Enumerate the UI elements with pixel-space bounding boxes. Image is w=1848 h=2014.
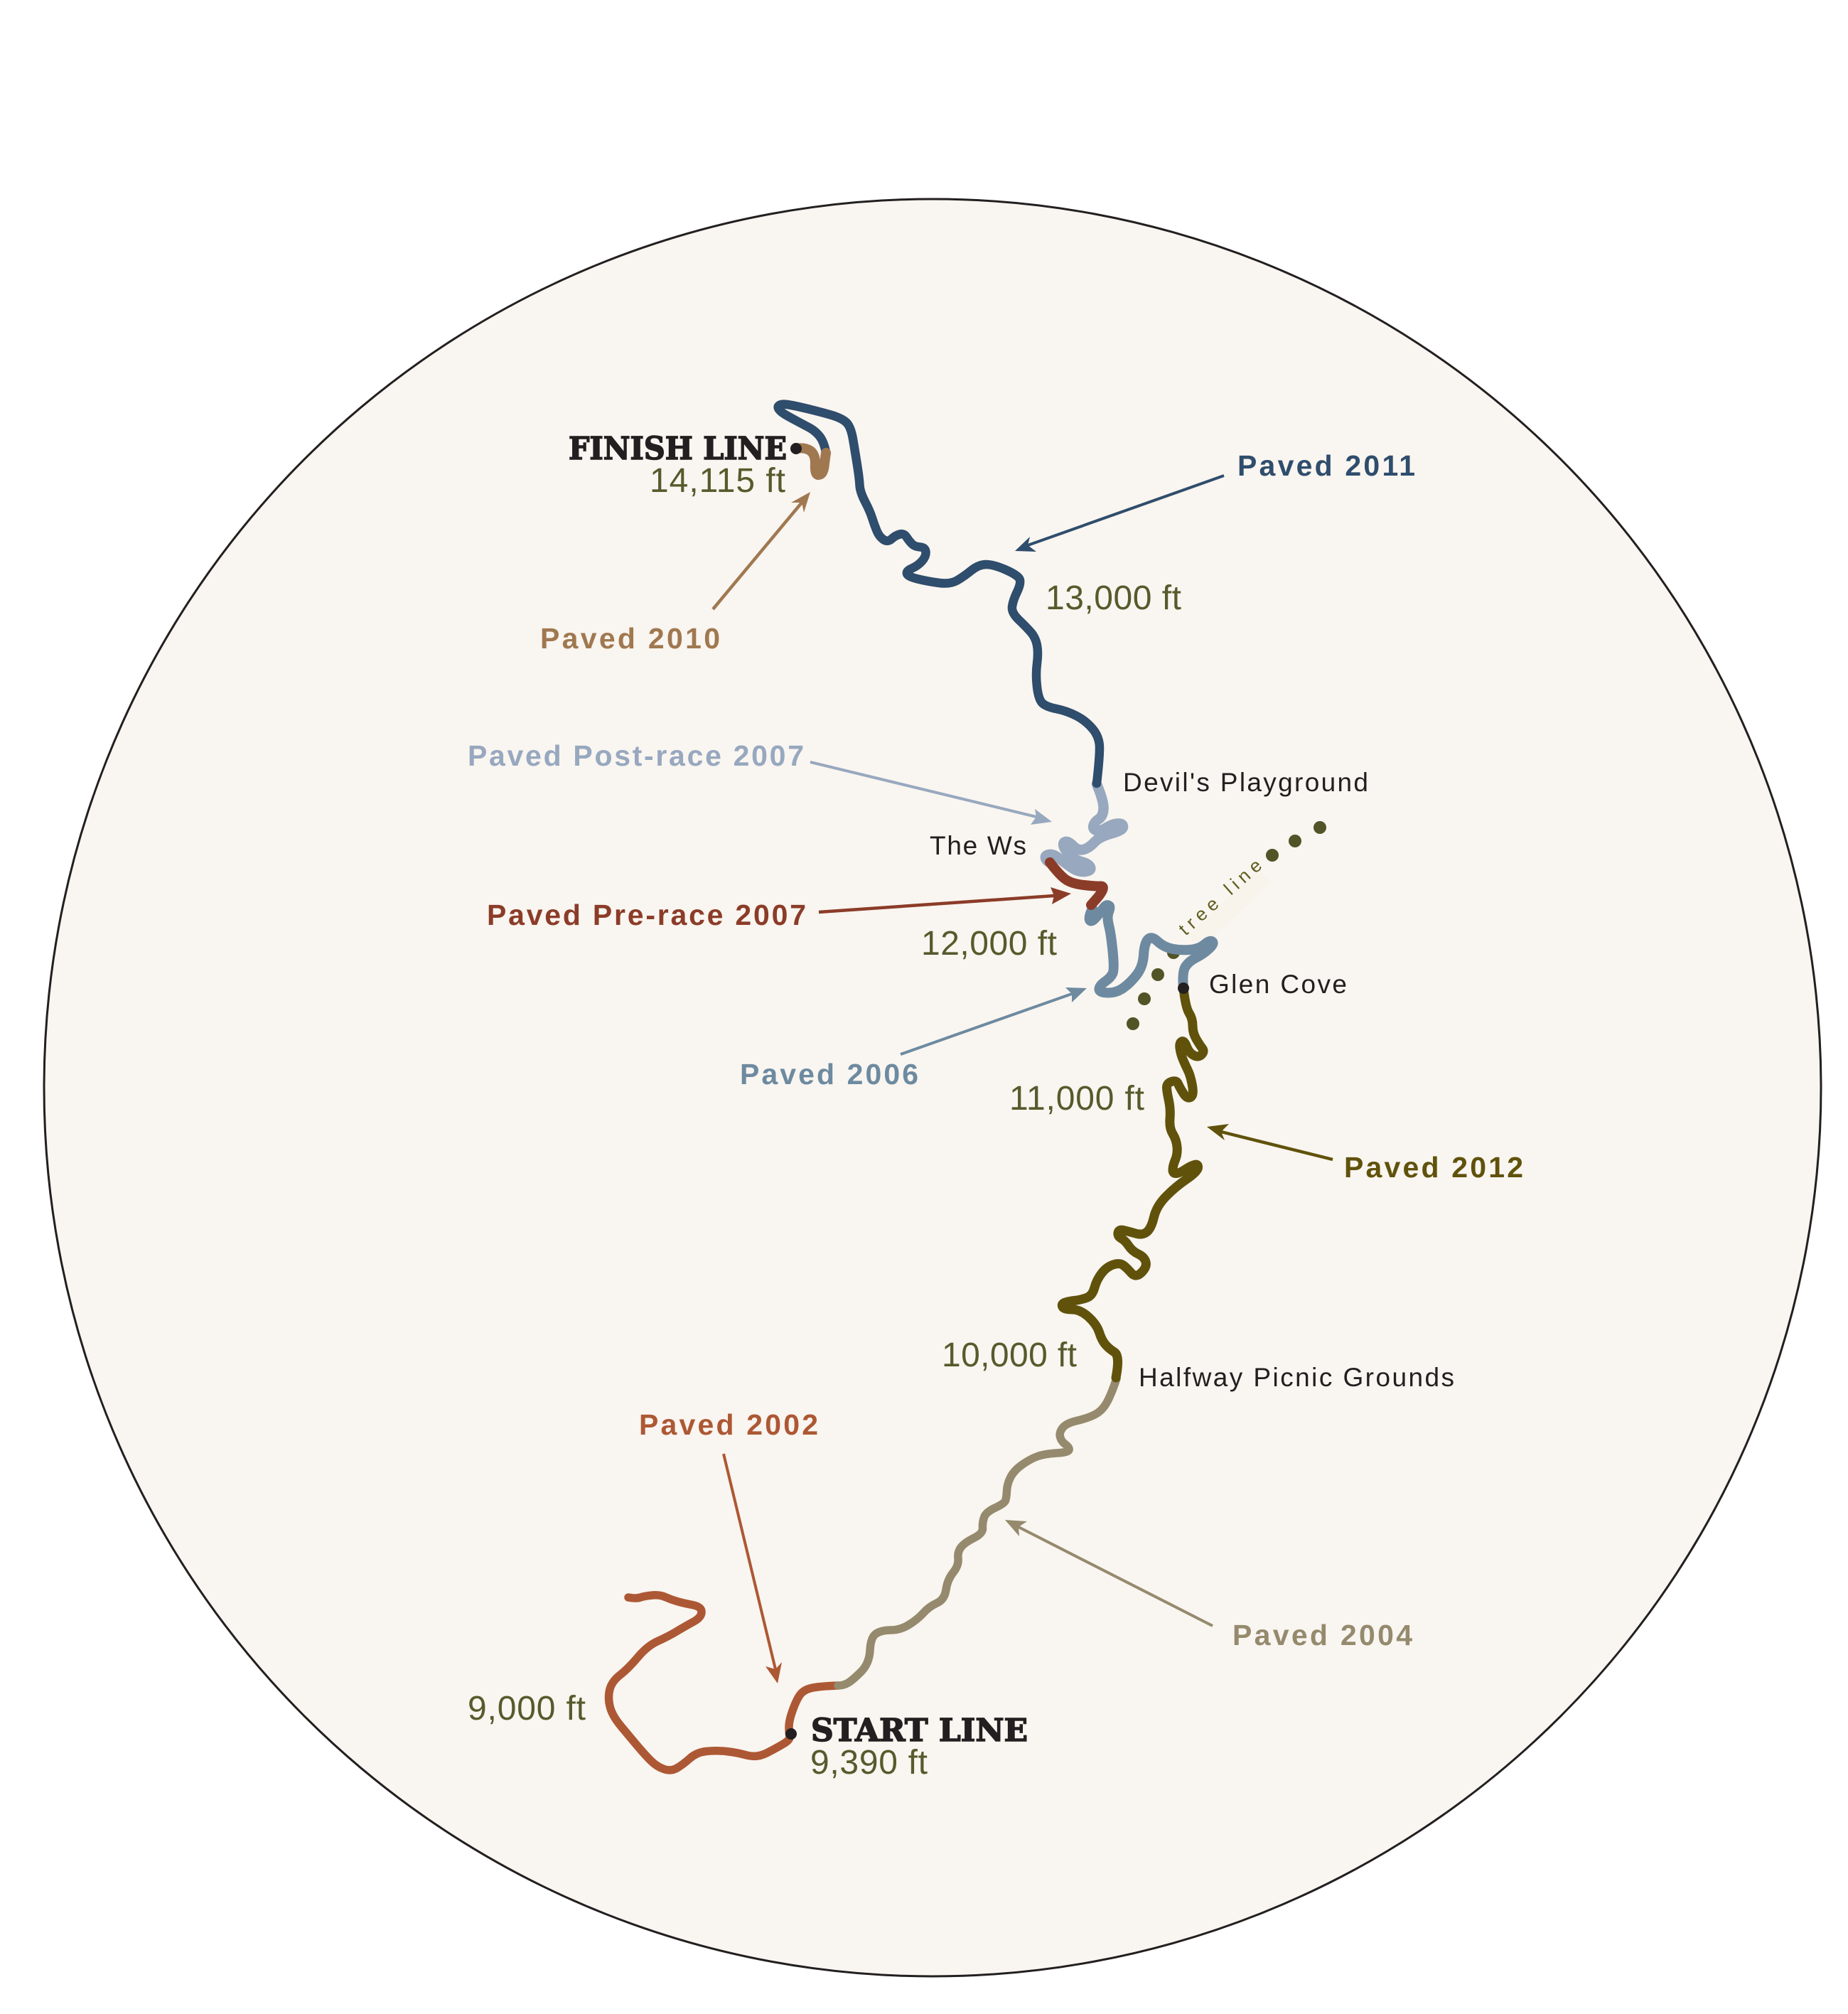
road segment: paved 2004: [838, 1378, 1117, 1686]
marker: finish line dot: [790, 443, 802, 454]
label: Paved Post-race 2007: Paved Post-race 2007: [468, 739, 804, 772]
road segment: paved 2002: [608, 1595, 838, 1770]
marker: Glen Cove dot: [1178, 982, 1189, 994]
elevation: 10,000 ft: 10,000 ft: [942, 1337, 1077, 1374]
elevation: 14,115 ft: 14,115 ft: [650, 462, 785, 500]
place: Devil's Playground: Devil's Playground: [1123, 768, 1368, 797]
place: The Ws: The Ws: [930, 831, 1026, 860]
arrow: paved 2011: [1015, 476, 1224, 552]
elevation: 9,000 ft: 9,000 ft: [468, 1690, 586, 1728]
arrow: paved post-race 2007: [810, 762, 1052, 825]
road segment: paved 2011: [778, 405, 1100, 783]
label: Paved 2004: Paved 2004: [1232, 1619, 1412, 1651]
arrow: paved 2004: [1005, 1520, 1213, 1626]
place: Glen Cove: Glen Cove: [1209, 970, 1347, 999]
road segment: paved 2012: [1062, 988, 1203, 1378]
label: Paved 2012: Paved 2012: [1344, 1151, 1523, 1184]
elevation: 9,390 ft: 9,390 ft: [810, 1744, 928, 1782]
road segment: paved pre-race 2007: [1050, 862, 1103, 905]
road segment: paved 2010: [796, 448, 826, 475]
place: Halfway Picnic Grounds: Halfway Picnic Grounds: [1139, 1363, 1454, 1392]
label: Paved Pre-race 2007: Paved Pre-race 2007: [487, 899, 806, 931]
label: Paved 2006: Paved 2006: [740, 1058, 918, 1091]
tree line: dotted elevation marker: tree line: [1174, 855, 1266, 939]
road segment: paved post-race 2007: [1046, 784, 1123, 872]
label: Paved 2010: Paved 2010: [540, 622, 720, 655]
arrow: paved 2012: [1207, 1124, 1333, 1159]
label: finish line: FINISH LINE: [569, 431, 787, 467]
label: Paved 2011: Paved 2011: [1237, 449, 1415, 482]
arrow: paved 2006: [901, 987, 1087, 1054]
label: Paved 2002: Paved 2002: [639, 1408, 818, 1441]
marker: start line dot: [785, 1728, 797, 1740]
elevation: 12,000 ft: 12,000 ft: [921, 925, 1057, 963]
arrow: paved 2010: [713, 492, 810, 609]
label: start line: START LINE: [811, 1713, 1028, 1749]
elevation: 11,000 ft: 11,000 ft: [1009, 1080, 1144, 1118]
road segment: paved 2006: [1089, 905, 1213, 993]
arrow: paved 2002: [724, 1454, 782, 1683]
arrow: paved pre-race 2007: [819, 887, 1071, 912]
tree line: dotted elevation marker: [1127, 821, 1326, 1030]
elevation: 13,000 ft: 13,000 ft: [1046, 579, 1181, 617]
